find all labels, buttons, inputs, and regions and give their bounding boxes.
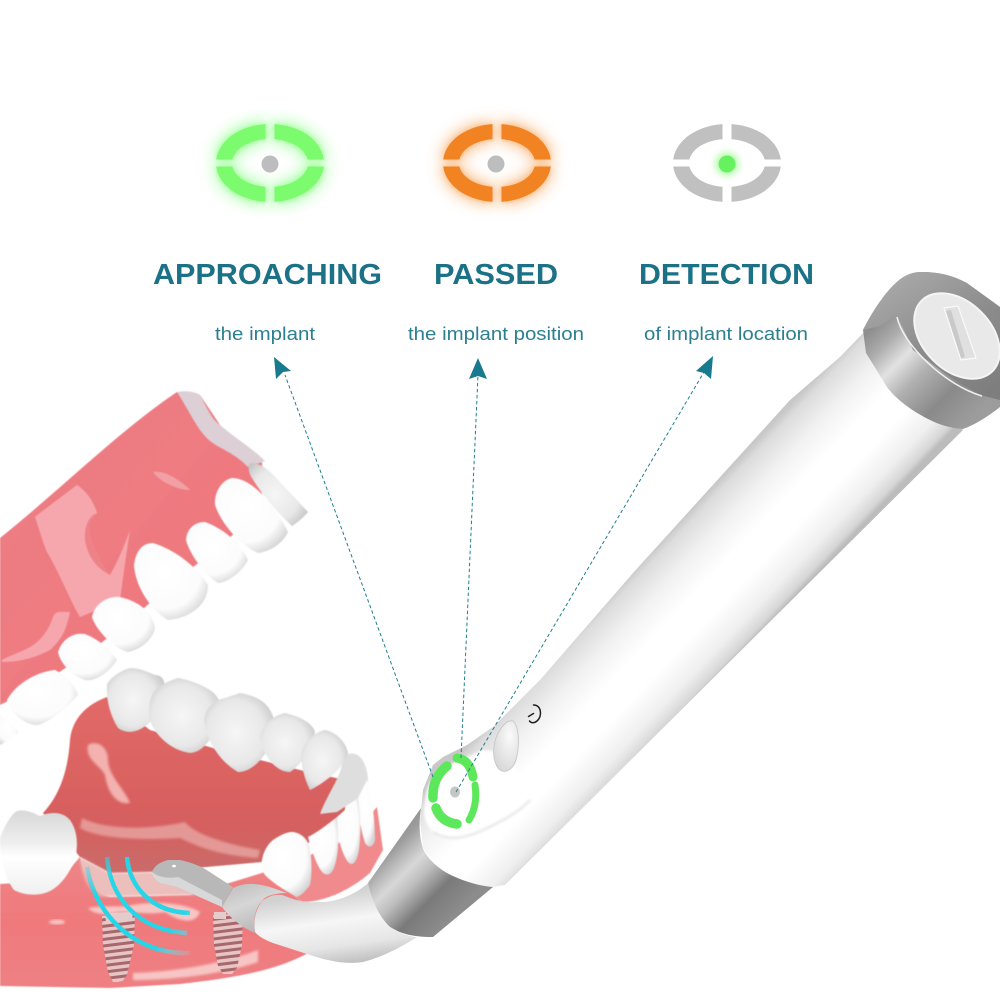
inner wave bbox=[127, 857, 190, 913]
status icon: approaching (green) bbox=[214, 122, 326, 204]
tooth bbox=[134, 543, 208, 620]
upper gum highlights bbox=[35, 485, 130, 617]
sensing waves bbox=[87, 857, 190, 953]
lower gum highlight bbox=[133, 950, 258, 980]
cap rim highlight bbox=[897, 317, 982, 396]
upper teeth bbox=[0, 463, 308, 745]
probe side face bbox=[152, 872, 222, 907]
gum fold highlight bbox=[80, 818, 260, 858]
upper gum back ridge bbox=[177, 391, 265, 467]
status icon: detection (grey ring, green dot) bbox=[673, 124, 781, 202]
incisor bbox=[337, 798, 360, 864]
lower gum highlight ribbon bbox=[88, 903, 200, 921]
silver end cap bbox=[863, 272, 1000, 429]
probe arm bbox=[152, 860, 233, 907]
outer wave bbox=[87, 867, 190, 953]
incisor bbox=[308, 817, 338, 875]
tooth bbox=[215, 478, 288, 553]
front gum bbox=[0, 857, 322, 988]
molar foreground bbox=[0, 810, 77, 895]
silver band bbox=[368, 808, 493, 937]
collar bbox=[222, 884, 287, 933]
white handle body bbox=[420, 328, 963, 887]
cap inner disc bbox=[898, 277, 1000, 395]
implant locator device bbox=[152, 272, 1000, 963]
lower gum spot highlight bbox=[49, 920, 65, 924]
inner gum bbox=[43, 697, 345, 873]
caption: of implant location: of implant location bbox=[644, 323, 808, 344]
lower jaw gums bbox=[0, 697, 383, 988]
arrow: to APPROACHING bbox=[274, 357, 433, 777]
tooth bbox=[0, 716, 18, 745]
charging port bbox=[944, 306, 976, 360]
far translucent tooth bbox=[320, 754, 368, 814]
molar bbox=[149, 678, 222, 753]
gum highlight bbox=[88, 743, 130, 803]
status icon: passed (orange) bbox=[441, 122, 553, 204]
lower back teeth bbox=[0, 668, 375, 897]
indicator ring bbox=[433, 758, 476, 824]
heading: APPROACHING: APPROACHING bbox=[153, 259, 382, 291]
right front gum bbox=[280, 807, 383, 902]
upper jaw bbox=[0, 391, 265, 705]
arrow: to DETECTION bbox=[456, 356, 713, 792]
tooth bbox=[249, 463, 308, 526]
cap top face bbox=[863, 272, 1000, 400]
tooth bbox=[186, 522, 248, 583]
arrow: to PASSED bbox=[461, 358, 487, 758]
middle wave bbox=[107, 857, 187, 933]
tooth bbox=[92, 597, 155, 652]
upper gum bbox=[0, 392, 262, 705]
tooth bbox=[7, 670, 78, 725]
caption: the implant position: the implant position bbox=[408, 323, 584, 344]
button bbox=[494, 721, 518, 771]
molar bbox=[204, 693, 275, 772]
canine near side bbox=[262, 832, 312, 897]
incisor bbox=[358, 780, 375, 846]
premolar bbox=[260, 713, 315, 772]
curved grip bbox=[254, 883, 417, 963]
heading: PASSED: PASSED bbox=[434, 259, 558, 291]
implant left bbox=[102, 912, 135, 982]
probe hole bbox=[172, 865, 176, 867]
power icon bbox=[528, 705, 541, 723]
indicator centre dot bbox=[450, 786, 460, 798]
tooth bbox=[58, 634, 117, 680]
molar bbox=[107, 668, 165, 732]
gum translucent band bbox=[80, 857, 200, 897]
head lower shading bbox=[433, 800, 530, 838]
implant right bbox=[213, 912, 243, 974]
caption: the implant: the implant bbox=[215, 323, 315, 344]
heading: DETECTION: DETECTION bbox=[639, 259, 814, 291]
premolar bbox=[302, 730, 348, 790]
head front face bbox=[424, 750, 528, 839]
